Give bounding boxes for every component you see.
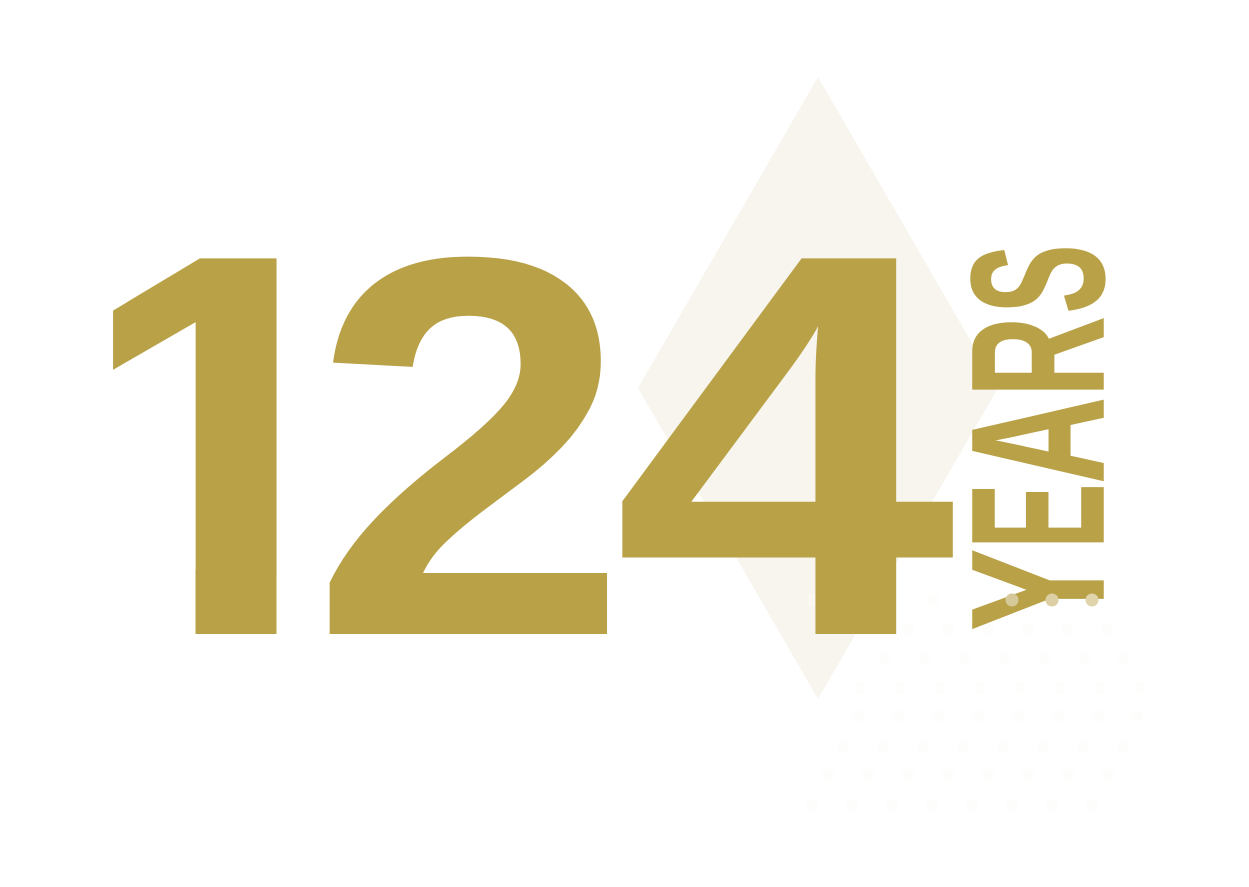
rotated word YEARS: A bbox=[932, 397, 1144, 484]
rotated word YEARS bbox=[932, 245, 1144, 630]
background diamond bbox=[638, 77, 998, 699]
rotated word YEARS: S bbox=[933, 245, 1144, 313]
digit 2: 2 bbox=[310, 145, 630, 749]
rotated word YEARS: R bbox=[932, 317, 1143, 397]
rotated word YEARS: E bbox=[932, 484, 1143, 548]
faint dot pattern bbox=[806, 594, 1146, 811]
digit 1 bbox=[113, 258, 277, 634]
digit 4: 4 bbox=[613, 141, 960, 750]
digit 1: 1 bbox=[58, 141, 386, 750]
rotated word YEARS: Y bbox=[932, 549, 1143, 630]
number 124 bbox=[113, 256, 953, 634]
dots over the Y bbox=[1006, 594, 1098, 606]
